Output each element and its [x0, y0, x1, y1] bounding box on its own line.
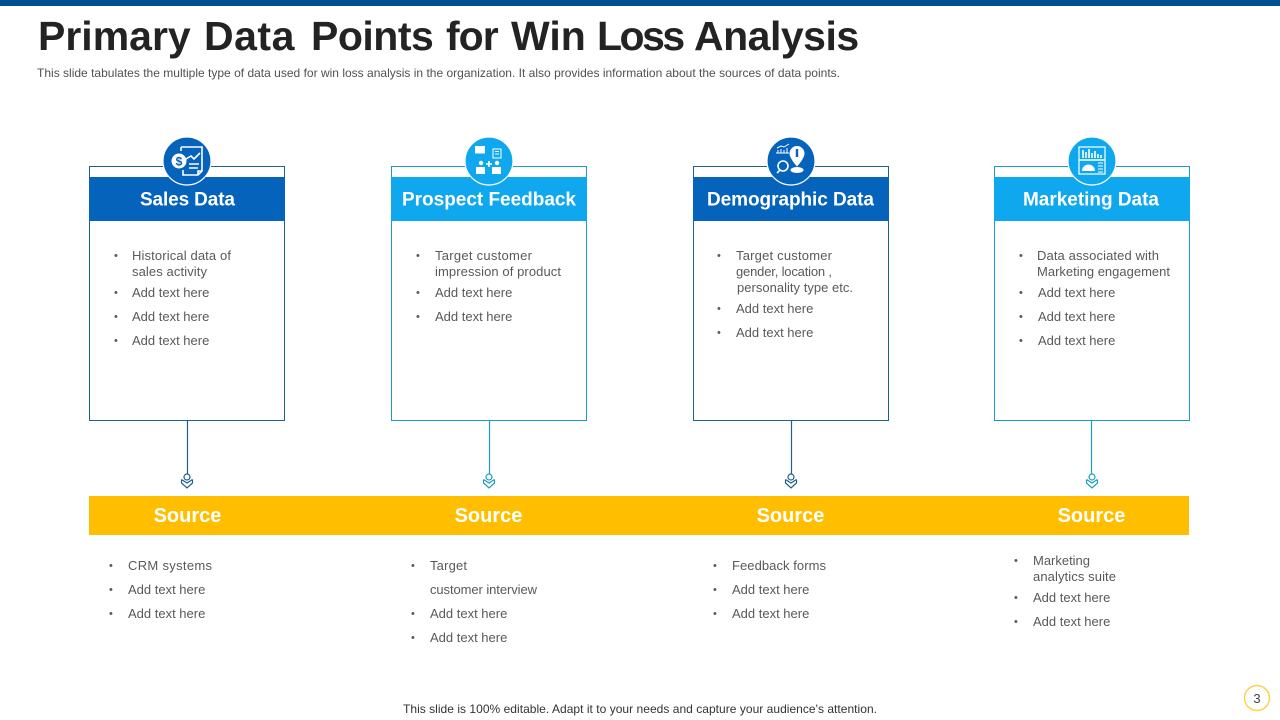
list: source 1: Add text here — [128, 606, 205, 621]
heading: demographic data: Demographic Data — [707, 190, 874, 210]
list: prospect feedback: • — [416, 311, 420, 323]
list: source 1: Add text here — [128, 582, 205, 597]
list: marketing data: • — [1019, 311, 1023, 323]
list: source 1: • — [109, 608, 113, 620]
list: source 1: CRM systems — [128, 558, 212, 573]
title: Primary — [38, 13, 191, 59]
list: sales data: sales activity — [132, 264, 208, 279]
card header: prospect feedback — [391, 177, 587, 221]
list: sales data: • — [114, 311, 118, 323]
list: source 4: Marketing — [1033, 553, 1090, 568]
list: source 4: Add text here — [1033, 614, 1110, 629]
list: prospect feedback: Target customer — [435, 248, 533, 263]
list: demographic data: Add text here — [736, 301, 813, 316]
list: source 2: • — [411, 560, 415, 572]
list: demographic data: • — [717, 303, 721, 315]
list: source 2 — [411, 558, 538, 645]
list: demographic data: gender, location , — [736, 264, 832, 279]
list: sales data: Add text here — [132, 285, 209, 300]
page number: 3 — [1253, 691, 1261, 706]
list: prospect feedback — [416, 248, 561, 324]
list: marketing data: • — [1019, 287, 1023, 299]
source band — [89, 496, 1189, 535]
title: Loss — [597, 13, 684, 59]
list: sales data: Historical data of — [132, 248, 231, 263]
title: for — [446, 13, 499, 59]
list: demographic data: • — [717, 250, 721, 262]
connector: prospect feedback to source — [484, 421, 494, 488]
heading: marketing data: Marketing Data — [1023, 190, 1159, 210]
title: Analysis — [694, 13, 859, 59]
list: prospect feedback: Add text here — [435, 285, 512, 300]
list: sales data: Add text here — [132, 333, 209, 348]
heading: sales data: Sales Data — [140, 190, 235, 210]
source band: Source — [757, 505, 824, 527]
list: source 4: analytics suite — [1033, 569, 1116, 584]
list: source 2: Target — [430, 558, 467, 573]
title: Win — [511, 13, 586, 59]
list: marketing data: • — [1019, 335, 1023, 347]
list: source 2: • — [411, 608, 415, 620]
list: source 3: Add text here — [732, 606, 809, 621]
list: source 2: Add text here — [430, 606, 507, 621]
source band: Source — [154, 505, 221, 527]
list: source 3: • — [713, 560, 717, 572]
list: marketing data: Add text here — [1038, 285, 1115, 300]
icon: sales report — [163, 137, 211, 185]
list: source 4: • — [1014, 616, 1018, 628]
list: demographic data: • — [717, 327, 721, 339]
list: source 2: • — [411, 632, 415, 644]
list: demographic data: personality type etc. — [737, 280, 853, 295]
footer note: This slide is 100% editable. Adapt it to your needs and capture your audience's attention. — [403, 702, 877, 716]
title: Points — [311, 13, 433, 59]
list: demographic data: Target customer — [736, 248, 833, 263]
list: source 4: • — [1014, 592, 1018, 604]
list: source 3: • — [713, 584, 717, 596]
list: source 3: Feedback forms — [732, 558, 826, 573]
list: marketing data: Add text here — [1038, 309, 1115, 324]
subtitle: This slide tabulates the multiple type of data used for win loss analysis in the organization. It also provides information about the sources of data points. — [37, 66, 840, 80]
list: source 4: • — [1014, 555, 1018, 567]
source band: Source — [1058, 505, 1125, 527]
card header: demographic data — [693, 177, 889, 221]
list: source 2: Add text here — [430, 630, 507, 645]
list: marketing data — [1019, 248, 1170, 348]
list: source 3 — [713, 558, 826, 621]
panel: marketing data — [994, 137, 1190, 420]
list: prospect feedback: impression of product — [435, 264, 561, 279]
list: source 4 — [1014, 553, 1116, 629]
list: sales data — [114, 248, 231, 348]
list: sales data: • — [114, 287, 118, 299]
panel: demographic data — [693, 137, 889, 420]
list: marketing data: Marketing engagement — [1037, 264, 1170, 279]
title: Data — [204, 13, 296, 59]
icon: dashboard — [1068, 137, 1116, 185]
connector: demographic data to source — [786, 421, 796, 488]
card header: sales data — [89, 177, 285, 221]
list: prospect feedback: • — [416, 287, 420, 299]
list: marketing data: Data associated with — [1037, 248, 1159, 263]
icon: people feedback — [465, 137, 513, 185]
top bar — [0, 0, 1280, 6]
list: prospect feedback: • — [416, 250, 420, 262]
list: demographic data: Add text here — [736, 325, 813, 340]
card header: marketing data — [994, 177, 1190, 221]
list: source 3: • — [713, 608, 717, 620]
panel: prospect feedback — [391, 137, 587, 420]
list: prospect feedback: Add text here — [435, 309, 512, 324]
list: source 1: • — [109, 560, 113, 572]
list: sales data: • — [114, 335, 118, 347]
panel: sales data — [89, 137, 285, 420]
connector: marketing data to source — [1086, 421, 1098, 488]
list: source 1: • — [109, 584, 113, 596]
list: source 2: customer interview — [430, 582, 538, 597]
connector: sales data to source — [182, 421, 192, 488]
icon: location and search — [767, 137, 815, 185]
list: source 1 — [109, 558, 212, 621]
list: demographic data — [717, 248, 853, 340]
page number — [1244, 686, 1270, 710]
list: sales data: • — [114, 250, 118, 262]
list: marketing data: Add text here — [1038, 333, 1115, 348]
list: source 4: Add text here — [1033, 590, 1110, 605]
list: marketing data: • — [1019, 250, 1023, 262]
source band: Source — [455, 505, 522, 527]
list: source 3: Add text here — [732, 582, 809, 597]
heading: prospect feedback: Prospect Feedback — [402, 190, 576, 210]
list: sales data: Add text here — [132, 309, 209, 324]
icon: sales report: $ — [176, 154, 183, 168]
